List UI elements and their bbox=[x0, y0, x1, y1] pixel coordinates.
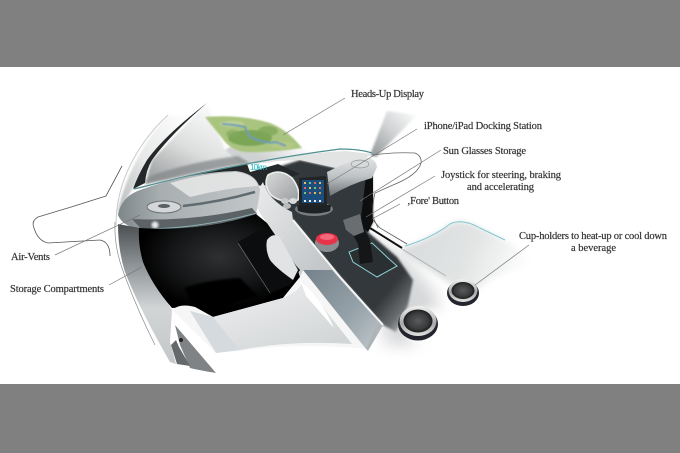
glass lower surface bbox=[250, 151, 372, 170]
right dash pod bbox=[327, 157, 377, 196]
label: Joystick: Joystick for steering, braking bbox=[441, 170, 562, 181]
label: Cup-holders bbox=[519, 231, 668, 254]
teal dashboard line bbox=[134, 149, 372, 189]
floor shadow bbox=[184, 278, 258, 310]
leader: cup-holders bbox=[475, 245, 529, 285]
console base bbox=[262, 160, 413, 332]
door strip bbox=[118, 224, 176, 364]
black right strip bbox=[360, 172, 373, 232]
head-up display map bbox=[205, 116, 302, 152]
silver band white edge bbox=[293, 220, 383, 325]
top grey band bbox=[0, 0, 680, 67]
leader lines bbox=[55, 98, 529, 285]
joystick bbox=[343, 214, 397, 277]
leader: sun glasses storage bbox=[360, 150, 441, 201]
driver seat bbox=[171, 270, 366, 373]
label: Cup-holders: a beverage bbox=[571, 243, 616, 254]
right pillar wedge bbox=[370, 111, 417, 157]
label: Air-Vents: Air-Vents bbox=[11, 252, 50, 263]
left outline bbox=[33, 166, 122, 256]
handle bbox=[238, 228, 300, 293]
cup-holder near bbox=[398, 306, 446, 344]
silver band bbox=[253, 182, 383, 351]
iPad dock bbox=[295, 176, 333, 216]
iPad app icons bbox=[304, 182, 321, 202]
bottom grey band bbox=[0, 384, 680, 453]
right door black line bbox=[370, 228, 402, 248]
centre oval vent bbox=[266, 172, 299, 201]
label: iPhone/iPad Docking Station: iPhone/iPad Docking Station bbox=[424, 121, 543, 132]
dashboard dark band bbox=[134, 164, 300, 190]
leader: fore button bbox=[372, 204, 400, 219]
label: Cup-holders: Cup-holders to heat-up or cool down bbox=[519, 231, 668, 242]
leader: heads-up display bbox=[283, 98, 345, 135]
passenger seat bbox=[402, 222, 542, 288]
left dash pod bbox=[118, 171, 260, 230]
leader: storage compartments bbox=[109, 267, 142, 285]
left dash vent bbox=[147, 201, 181, 213]
blue-grey panel bbox=[303, 270, 378, 349]
windshield and A-pillar bbox=[116, 103, 310, 225]
label: Sun Glasses Storage: Sun Glasses Storage bbox=[443, 146, 526, 157]
light floor gradient behind console bbox=[372, 236, 440, 345]
small buttons bbox=[281, 198, 297, 209]
Fore button bbox=[315, 233, 339, 252]
door outer line bbox=[115, 222, 155, 345]
leader: joystick bbox=[366, 176, 435, 217]
label: Joystick: and accelerating bbox=[467, 182, 535, 193]
passenger seat teal edge bbox=[405, 222, 505, 246]
label: Joystick bbox=[441, 170, 562, 193]
leader: docking station bbox=[327, 129, 417, 184]
right door upper line bbox=[373, 220, 407, 244]
leader: air-vents bbox=[55, 215, 140, 255]
right door lower line bbox=[402, 249, 446, 276]
label: Heads-Up Display: Heads-Up Display bbox=[351, 89, 425, 100]
label: Fore Button: ‚Fore' Button bbox=[407, 196, 460, 207]
right outline bbox=[372, 153, 421, 228]
cup-holder far bbox=[447, 279, 479, 306]
label: Storage Compartments: Storage Compartments bbox=[10, 284, 104, 295]
footwell black bbox=[139, 214, 300, 317]
speed display: 10km bbox=[250, 163, 267, 172]
interior illustration bbox=[33, 103, 542, 373]
